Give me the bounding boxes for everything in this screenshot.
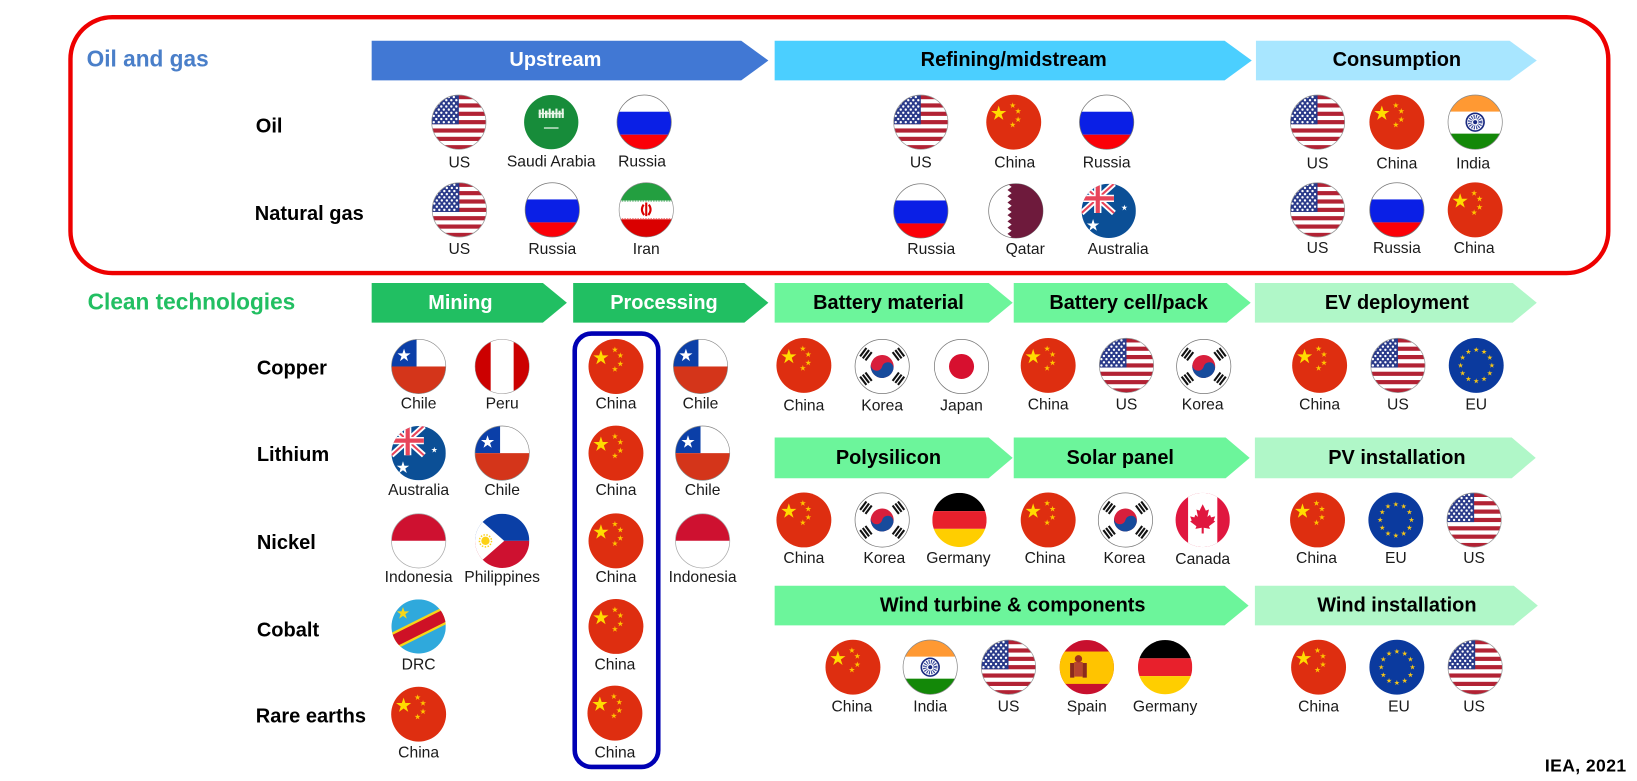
flag: China, rare earths mining: China bbox=[398, 744, 439, 761]
flag: Indonesia, nickel mining: Indonesia bbox=[385, 569, 453, 586]
row label: oil: Oil bbox=[256, 115, 282, 137]
flag: Germany, wind turbine bbox=[1133, 640, 1197, 715]
flag: Russia, oil upstream bbox=[617, 95, 671, 170]
arrow: consumption: Consumption bbox=[1333, 49, 1461, 71]
flag: China, wind installation: China bbox=[1298, 698, 1339, 715]
flag: Peru, copper mining: Peru bbox=[486, 396, 519, 413]
flag: US, battery cell: US bbox=[1116, 397, 1137, 414]
flag: Canada, solar panel bbox=[1175, 493, 1230, 568]
arrow: PV installation bbox=[1255, 437, 1536, 478]
flag: Russia, oil refining: Russia bbox=[1083, 154, 1131, 171]
arrow: refining/midstream: Refining/midstream bbox=[921, 49, 1107, 71]
flag: China, rare earths processing: China bbox=[594, 744, 636, 761]
flag: Australia, gas midstream bbox=[1082, 184, 1149, 258]
flag: Indonesia, nickel mining bbox=[385, 514, 453, 586]
row label: copper: Copper bbox=[257, 358, 327, 380]
flag: Chile, lithium processing: Chile bbox=[685, 482, 721, 499]
heading: clean technologies: Clean technologies bbox=[88, 289, 295, 315]
arrow: wind installation: Wind installation bbox=[1317, 595, 1477, 617]
arrow: polysilicon bbox=[775, 437, 1013, 478]
flag: EU, wind installation: EU bbox=[1388, 698, 1410, 715]
flag: EU, EV deployment bbox=[1449, 338, 1504, 414]
flag: Chile, lithium processing bbox=[675, 426, 730, 499]
flag: Australia, gas midstream: Australia bbox=[1088, 241, 1149, 258]
flag: China, oil consumption: China bbox=[1376, 155, 1418, 172]
flag: China, nickel processing bbox=[589, 513, 643, 586]
flag: Australia, lithium mining: Australia bbox=[388, 482, 449, 499]
flag: China, rare earths mining bbox=[391, 687, 446, 761]
flag: Germany, polysilicon: Germany bbox=[926, 550, 991, 567]
flag: China, oil refining: China bbox=[994, 154, 1036, 171]
flag: China, battery cell bbox=[1021, 338, 1076, 414]
arrow: wind turbine and components bbox=[775, 586, 1249, 625]
arrow: EV deployment bbox=[1255, 283, 1537, 323]
flag: Philippines, nickel mining bbox=[464, 512, 540, 586]
flag: China, polysilicon: China bbox=[783, 550, 825, 567]
flag: China, cobalt processing: China bbox=[594, 657, 636, 674]
flag: US, PV installation bbox=[1447, 493, 1501, 567]
flag: US, wind installation bbox=[1448, 640, 1502, 715]
flag: DRC, cobalt mining: DRC bbox=[402, 657, 436, 674]
flag: US, wind installation: US bbox=[1463, 698, 1485, 715]
flag: China, EV deployment bbox=[1292, 338, 1347, 414]
row label: nickel: Nickel bbox=[257, 532, 316, 554]
arrow: processing bbox=[573, 283, 768, 323]
flag: Iran, gas upstream bbox=[619, 183, 673, 258]
flag: Korea, battery cell: Korea bbox=[1182, 397, 1224, 414]
row label: natural gas: Natural gas bbox=[255, 203, 364, 225]
flag: DRC, cobalt mining bbox=[387, 599, 450, 674]
flag: US, wind turbine bbox=[981, 640, 1036, 715]
flag: US, oil consumption: US bbox=[1307, 155, 1328, 172]
flag: US, oil consumption bbox=[1290, 95, 1345, 172]
flag: China, solar panel bbox=[1021, 493, 1076, 567]
arrow: upstream bbox=[372, 41, 768, 80]
flag: US, oil refining: US bbox=[910, 154, 932, 171]
flag: Saudi Arabia, oil upstream bbox=[507, 95, 596, 170]
arrow: EV deployment: EV deployment bbox=[1325, 292, 1469, 314]
flag: Russia, gas midstream bbox=[894, 184, 955, 258]
flag: EU, PV installation: EU bbox=[1385, 550, 1407, 567]
flag: Chile, lithium mining: Chile bbox=[484, 482, 520, 499]
arrow: polysilicon: Polysilicon bbox=[836, 447, 941, 469]
arrow: wind installation bbox=[1255, 586, 1538, 625]
flag: China, lithium processing: China bbox=[596, 482, 637, 499]
arrow: processing: Processing bbox=[610, 292, 718, 314]
flag: Chile, copper processing: Chile bbox=[683, 396, 719, 413]
flag: EU, PV installation bbox=[1368, 493, 1423, 567]
flag: US, gas upstream: US bbox=[448, 241, 470, 258]
flag: Korea, polysilicon: Korea bbox=[863, 550, 905, 567]
flag: US, battery cell bbox=[1099, 338, 1154, 414]
arrow: solar panel bbox=[1014, 437, 1250, 478]
flag: Korea, solar panel bbox=[1098, 493, 1153, 567]
flag: Iran, gas upstream: Iran bbox=[633, 241, 660, 258]
flag: Russia, oil refining bbox=[1080, 95, 1134, 171]
flag: China, copper processing bbox=[589, 339, 643, 413]
flag: China, PV installation: China bbox=[1296, 550, 1337, 567]
flag: Spain, wind turbine: Spain bbox=[1067, 698, 1107, 715]
row label: rare earths: Rare earths bbox=[256, 705, 366, 727]
arrow: consumption bbox=[1256, 41, 1537, 80]
flag: US, PV installation: US bbox=[1463, 550, 1485, 567]
flag: US, EV deployment bbox=[1371, 338, 1425, 414]
flag: India, wind turbine bbox=[903, 640, 957, 715]
flag: US, gas upstream bbox=[432, 183, 487, 258]
flag: China, battery material: China bbox=[783, 398, 825, 415]
flag: Korea, solar panel: Korea bbox=[1104, 550, 1146, 567]
flag: China, EV deployment: China bbox=[1299, 397, 1340, 414]
row label: cobalt: Cobalt bbox=[257, 620, 319, 642]
flag: EU, wind installation bbox=[1369, 640, 1424, 715]
flag: Qatar, gas midstream bbox=[989, 184, 1045, 258]
flag: Russia, gas consumption: Russia bbox=[1373, 240, 1421, 257]
flag: India, wind turbine: India bbox=[913, 698, 947, 715]
flag: China, copper processing: China bbox=[596, 396, 637, 413]
arrow: refining/midstream bbox=[775, 41, 1252, 80]
arrow: solar panel: Solar panel bbox=[1066, 447, 1174, 469]
flag: Philippines, nickel mining: Philippines bbox=[464, 569, 540, 586]
flag: Japan, battery material: Japan bbox=[940, 398, 983, 415]
flag: US, oil refining bbox=[894, 95, 948, 171]
source credit: IEA, 2021 bbox=[1545, 755, 1627, 775]
flag: Russia, gas upstream bbox=[525, 183, 579, 258]
arrow: battery material bbox=[775, 283, 1013, 323]
flag: Spain, wind turbine bbox=[1060, 640, 1114, 715]
flag: Chile, copper mining bbox=[392, 339, 446, 413]
flag: Korea, polysilicon bbox=[855, 493, 909, 567]
flag: Russia, gas upstream: Russia bbox=[528, 241, 576, 258]
flag: US, gas consumption: US bbox=[1307, 240, 1328, 257]
flag: China, lithium processing bbox=[589, 426, 643, 499]
flag: Chile, copper mining: Chile bbox=[401, 396, 437, 413]
arrow: battery material: Battery material bbox=[813, 292, 964, 314]
flag: Japan, battery material bbox=[934, 339, 989, 415]
flag: China, wind installation bbox=[1291, 640, 1346, 715]
flag: Korea, battery material: Korea bbox=[861, 398, 903, 415]
flag: China, battery material bbox=[776, 338, 831, 415]
flag: US, oil upstream: US bbox=[448, 154, 470, 171]
arrow: mining bbox=[372, 283, 567, 323]
flag: Qatar, gas midstream: Qatar bbox=[1006, 241, 1045, 258]
flag: Korea, battery material bbox=[855, 339, 909, 415]
flag: Australia, lithium mining bbox=[388, 426, 449, 499]
flag: Indonesia, nickel processing: Indonesia bbox=[669, 569, 737, 586]
flag: Canada, solar panel: Canada bbox=[1175, 551, 1230, 568]
arrow: PV installation: PV installation bbox=[1328, 447, 1466, 469]
flag: China, battery cell: China bbox=[1028, 397, 1069, 414]
flag: China, polysilicon bbox=[776, 493, 831, 567]
flag: China, wind turbine bbox=[825, 640, 880, 715]
flag: Russia, gas midstream: Russia bbox=[907, 241, 955, 258]
flag: Germany, wind turbine: Germany bbox=[1133, 698, 1197, 715]
flag: China, cobalt processing bbox=[589, 599, 643, 674]
flag: Chile, lithium mining bbox=[475, 426, 529, 499]
flag: Russia, oil upstream: Russia bbox=[618, 153, 666, 170]
flag: Germany, polysilicon bbox=[926, 493, 991, 567]
flag: US, EV deployment: US bbox=[1387, 397, 1409, 414]
flag: China, wind turbine: China bbox=[831, 698, 873, 715]
arrow: battery cell/pack: Battery cell/pack bbox=[1049, 292, 1209, 314]
flag: China, gas consumption bbox=[1448, 182, 1503, 257]
flag: US, oil upstream bbox=[432, 95, 486, 171]
flag: Russia, gas consumption bbox=[1370, 183, 1424, 257]
heading: oil and gas: Oil and gas bbox=[87, 45, 209, 71]
arrow: mining: Mining bbox=[428, 292, 493, 314]
flag: Korea, battery cell bbox=[1177, 339, 1231, 414]
flag: China, PV installation bbox=[1290, 493, 1345, 567]
flag: India, oil consumption: India bbox=[1456, 155, 1490, 172]
flag: China, oil refining bbox=[986, 95, 1041, 171]
callout: blue box around China processing bbox=[575, 334, 658, 767]
flag: China, solar panel: China bbox=[1025, 550, 1066, 567]
flag: China, rare earths processing bbox=[587, 686, 642, 761]
arrow: upstream: Upstream bbox=[509, 49, 601, 71]
flag: India, oil consumption bbox=[1448, 95, 1502, 172]
flag: US, wind turbine: US bbox=[998, 698, 1019, 715]
flag: Peru, copper mining bbox=[475, 339, 529, 413]
flag: EU, EV deployment: EU bbox=[1465, 397, 1487, 414]
arrow: battery cell/pack bbox=[1014, 283, 1251, 323]
flag: US, gas consumption bbox=[1290, 183, 1345, 257]
flag: Chile, copper processing bbox=[673, 339, 728, 413]
flag: China, nickel processing: China bbox=[596, 569, 637, 586]
arrow: wind turbine and components: Wind turbine & components bbox=[880, 595, 1146, 617]
panel: oil and gas frame bbox=[70, 17, 1608, 273]
flag: China, gas consumption: China bbox=[1454, 240, 1495, 257]
flag: Saudi Arabia, oil upstream: Saudi Arabia bbox=[507, 153, 596, 170]
flag: Indonesia, nickel processing bbox=[669, 514, 737, 586]
row label: lithium: Lithium bbox=[257, 444, 329, 466]
flag: China, oil consumption bbox=[1369, 95, 1424, 172]
